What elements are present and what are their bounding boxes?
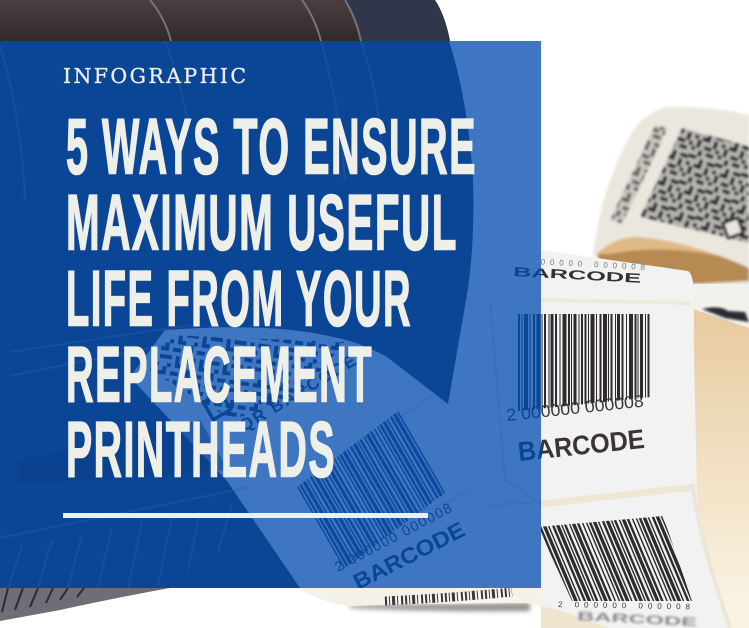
panel: QR label text: QR BARCODE <box>236 351 359 435</box>
divider rule <box>63 513 428 518</box>
photo: printer top <box>0 0 450 41</box>
photo: straight barcode: BARCODE <box>516 424 646 467</box>
panel: overlaid curved barcode label: BARCODE <box>349 517 469 594</box>
photo: curved barcode: BARCODE <box>577 609 697 628</box>
title <box>66 102 477 494</box>
photo: shadow and curled label bottom <box>298 586 541 611</box>
panel: printer ridges <box>0 41 382 588</box>
panel: blue overlay <box>0 41 541 588</box>
photo: label sheet and cream backing <box>500 250 749 628</box>
panel: overlaid curved barcode <box>320 451 423 528</box>
eyebrow: INFOGRAPHIC: INFOGRAPHIC <box>63 64 246 88</box>
panel: overlaid straight barcode text <box>507 267 541 461</box>
panel: overlaid straight barcode text: BARCODE <box>516 424 646 467</box>
panel: overlaid straight barcode <box>518 314 540 411</box>
photo: curved barcode: 2 000000 000008 <box>558 600 691 611</box>
title: REPLACEMENT <box>66 330 373 418</box>
panel: QR finder <box>203 392 231 420</box>
photo: curved barcode <box>555 561 697 628</box>
photo: straight barcode: 2 000000 000008 <box>515 256 646 272</box>
photo: straight barcode: BARCODE <box>513 264 642 286</box>
panel: QR code on label <box>150 335 345 420</box>
photo: straight barcode: 2 000000 000008 <box>505 392 645 425</box>
panel: overlaid barcode digits: 2 000000 000008 <box>332 499 454 575</box>
photo: straight barcode <box>541 258 650 459</box>
panel: overlaid straight barcode text: BARCODE <box>513 264 642 286</box>
photo: rolled QR label <box>593 107 749 290</box>
panel: overlaid straight barcode text: 2 000000 000008 <box>505 392 645 425</box>
title: PRINTHEADS <box>66 404 336 494</box>
panel: printer slot <box>181 420 224 471</box>
photo: printer base <box>0 588 170 621</box>
panel: dark printer area <box>0 41 473 588</box>
panel: label seams <box>340 300 541 512</box>
